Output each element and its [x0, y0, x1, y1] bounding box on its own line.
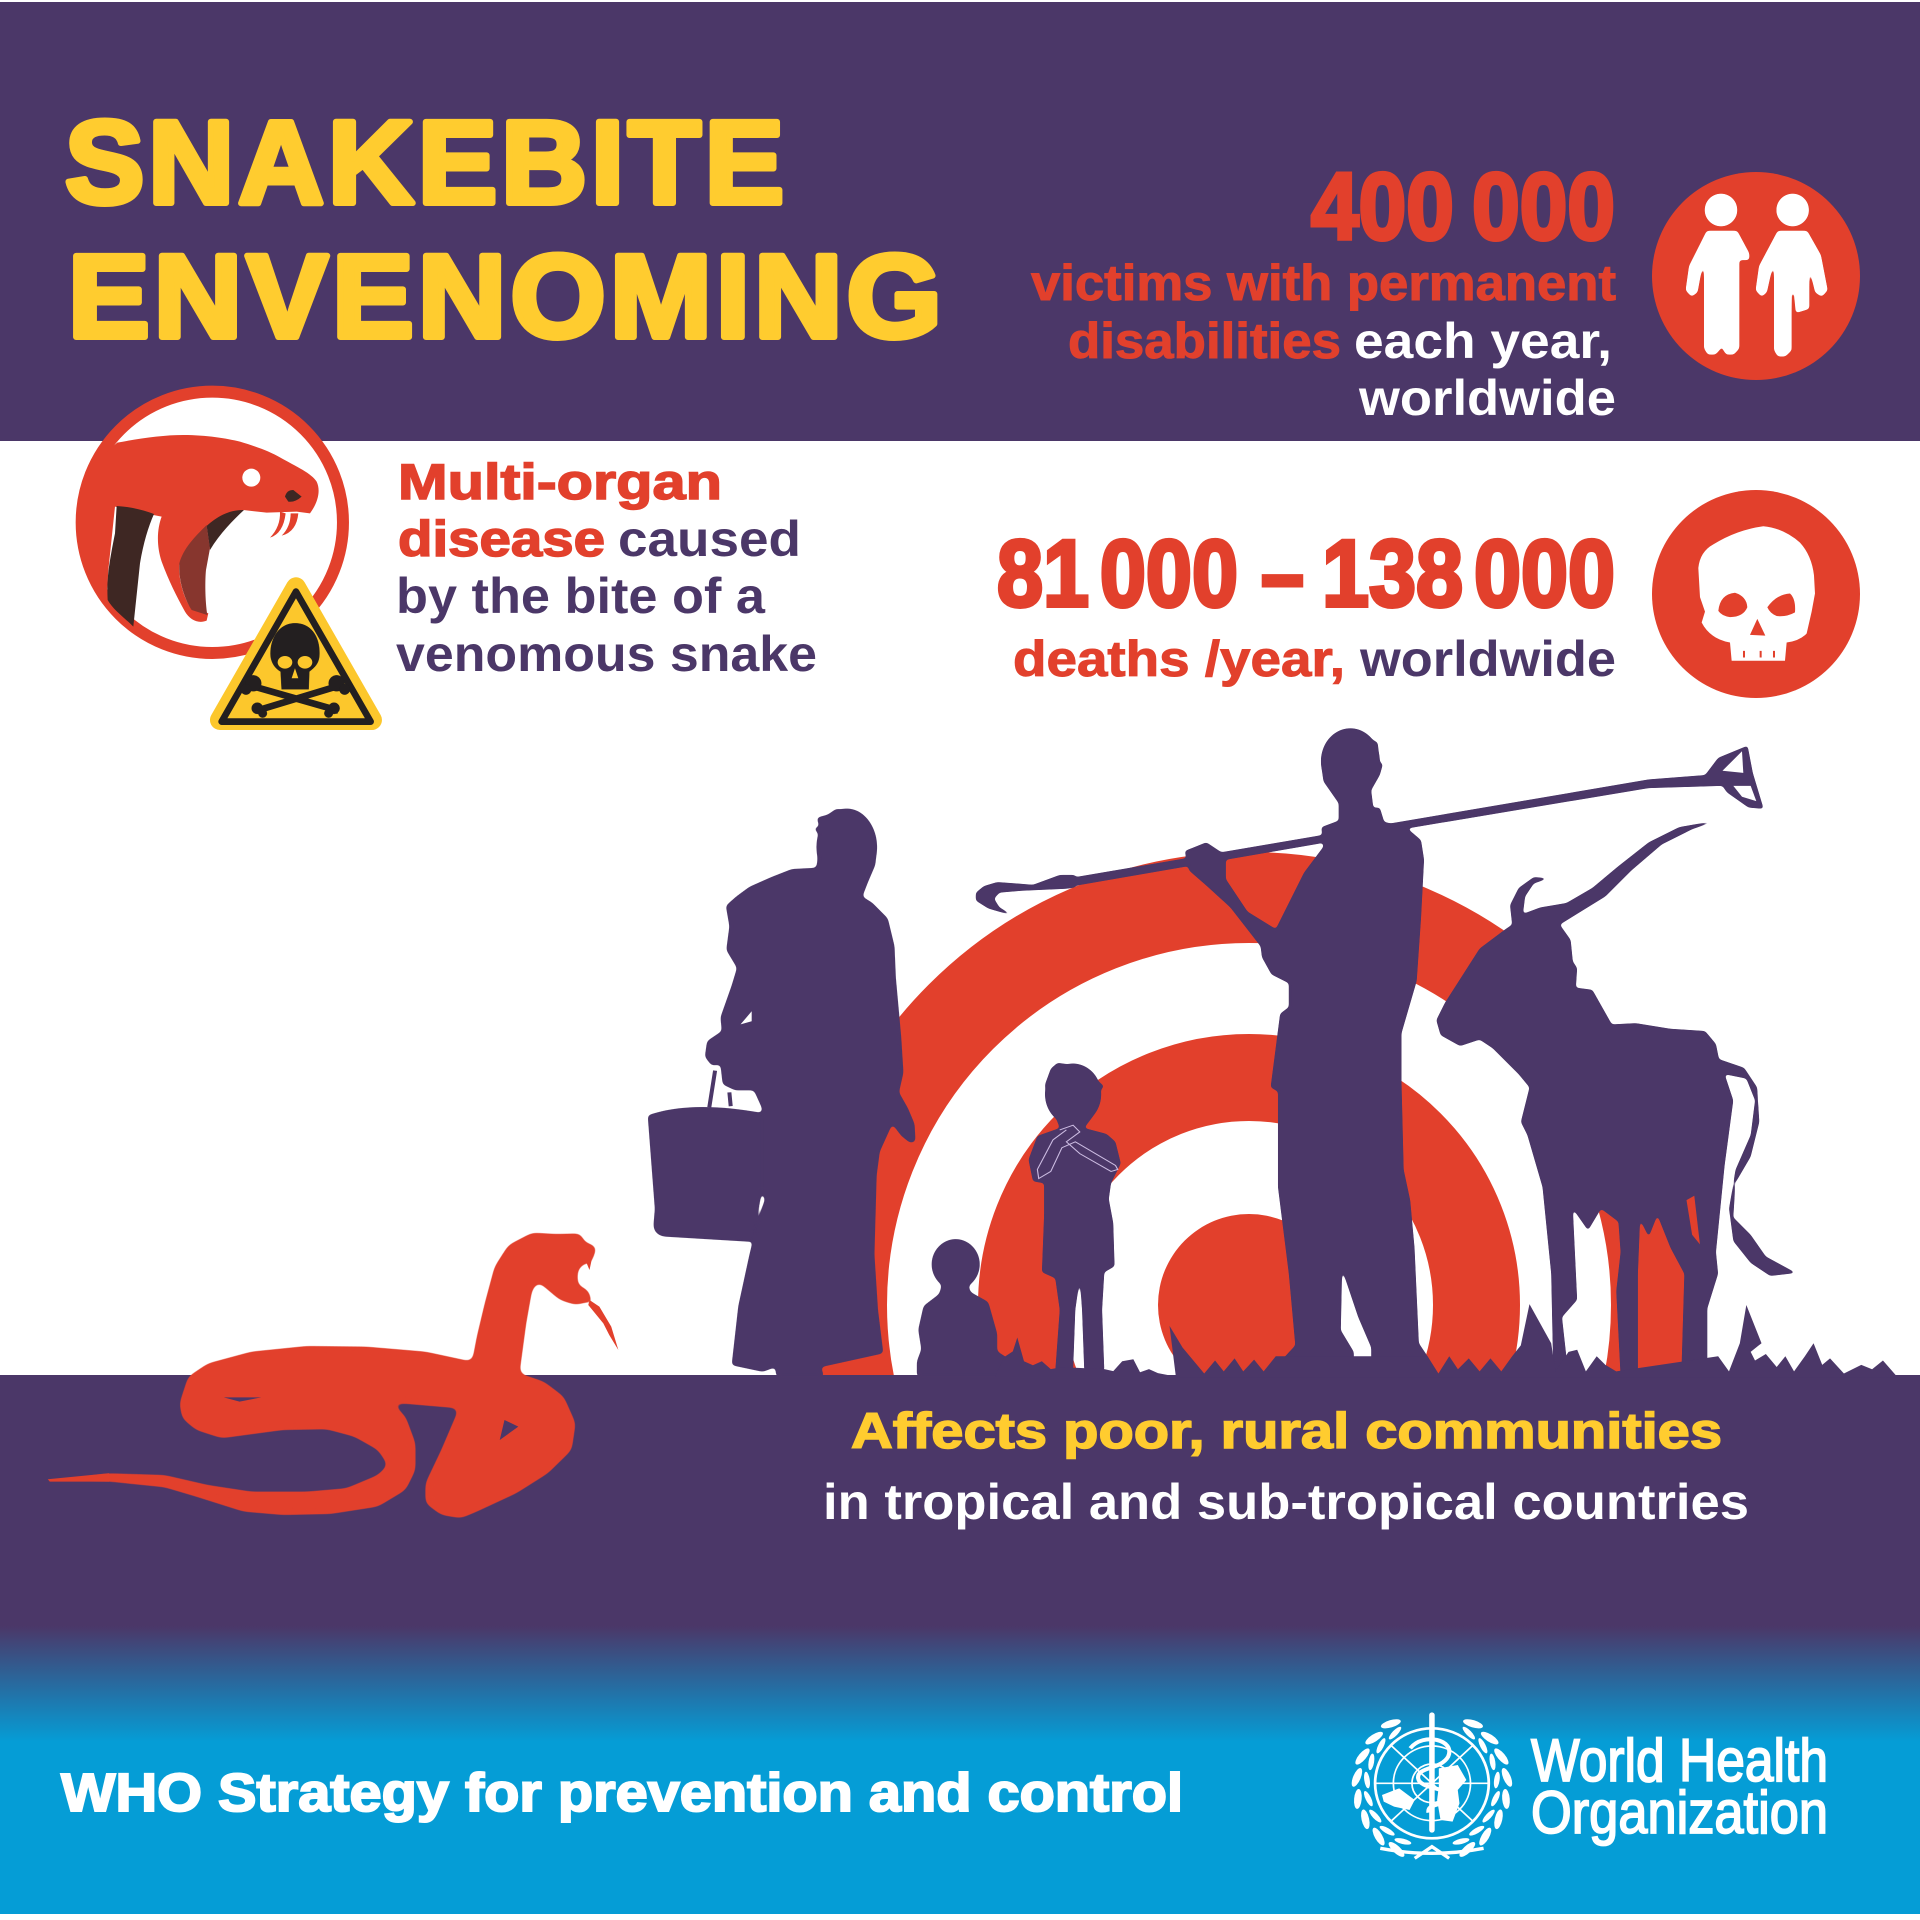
- statistic: disabilities: each year,: [1354, 313, 1612, 369]
- text: affects poor rural communities: Affects poor, rural communities: [851, 1403, 1722, 1459]
- statistic: deaths: [997, 521, 1616, 687]
- title: [65, 97, 946, 363]
- silhouette: cow: [1436, 820, 1796, 1376]
- statistic: deaths: deaths /year,: [1013, 631, 1345, 687]
- icon: snake head in circle: [77, 392, 343, 653]
- statistic: disabilities: worldwide: [1358, 370, 1616, 426]
- statistic: disabilities: disabilities: [1068, 313, 1341, 369]
- statistic: deaths: worldwide: [1359, 631, 1616, 687]
- text: multi-organ disease: caused: [618, 511, 801, 567]
- icon: fangs: [270, 512, 298, 538]
- top band: [0, 2, 1920, 441]
- statistic: disabilities: victims with permanent: [1031, 255, 1616, 311]
- logo: World Health Organization emblem: [1349, 1713, 1515, 1860]
- logo: World Health Organization wordmark: [1531, 1727, 1828, 1846]
- statistic: disabilities: 400 000: [1311, 154, 1615, 260]
- statistic: deaths: 81 000: [997, 521, 1238, 627]
- statistic: deaths: 138 000: [1322, 521, 1615, 627]
- icon: skull: [1652, 490, 1860, 698]
- target rings: [822, 852, 1684, 1375]
- text: WHO strategy: WHO Strategy for prevention and control: [61, 1763, 1183, 1823]
- grass: [995, 1304, 1898, 1378]
- silhouette: standing child: [1028, 1063, 1121, 1371]
- icon: snake nostril: [285, 490, 302, 502]
- text: multi-organ disease: Multi-organ: [398, 454, 722, 510]
- icon: snake eye: [242, 469, 260, 487]
- icon: two people with disabilities: [1652, 172, 1860, 380]
- logo: World Health Organization wordmark: Organization: [1531, 1779, 1828, 1846]
- text: multi-organ disease: [396, 454, 817, 682]
- statistic: deaths: –: [1261, 521, 1304, 627]
- text: affects poor rural communities: [823, 1403, 1749, 1530]
- silhouette: seated toddler: [917, 1239, 1013, 1377]
- text: multi-organ disease: venomous snake: [396, 626, 817, 682]
- snake silhouette: [48, 1233, 618, 1518]
- title: SNAKEBITE: [65, 97, 788, 229]
- silhouette: woman with bucket: [648, 808, 916, 1377]
- text: multi-organ disease: by the bite of a: [396, 568, 766, 624]
- title: ENVENOMING: [68, 231, 946, 363]
- silhouette: man with hoe: [976, 728, 1764, 1376]
- text: multi-organ disease: disease: [398, 511, 605, 567]
- icon: poison warning triangle: [220, 587, 372, 722]
- bottom band: [0, 1375, 1920, 1914]
- text: affects poor rural communities: in tropical and sub-tropical countries: [823, 1474, 1749, 1530]
- logo: World Health Organization wordmark: World Health: [1531, 1727, 1828, 1794]
- statistic: disabilities: [1031, 154, 1616, 426]
